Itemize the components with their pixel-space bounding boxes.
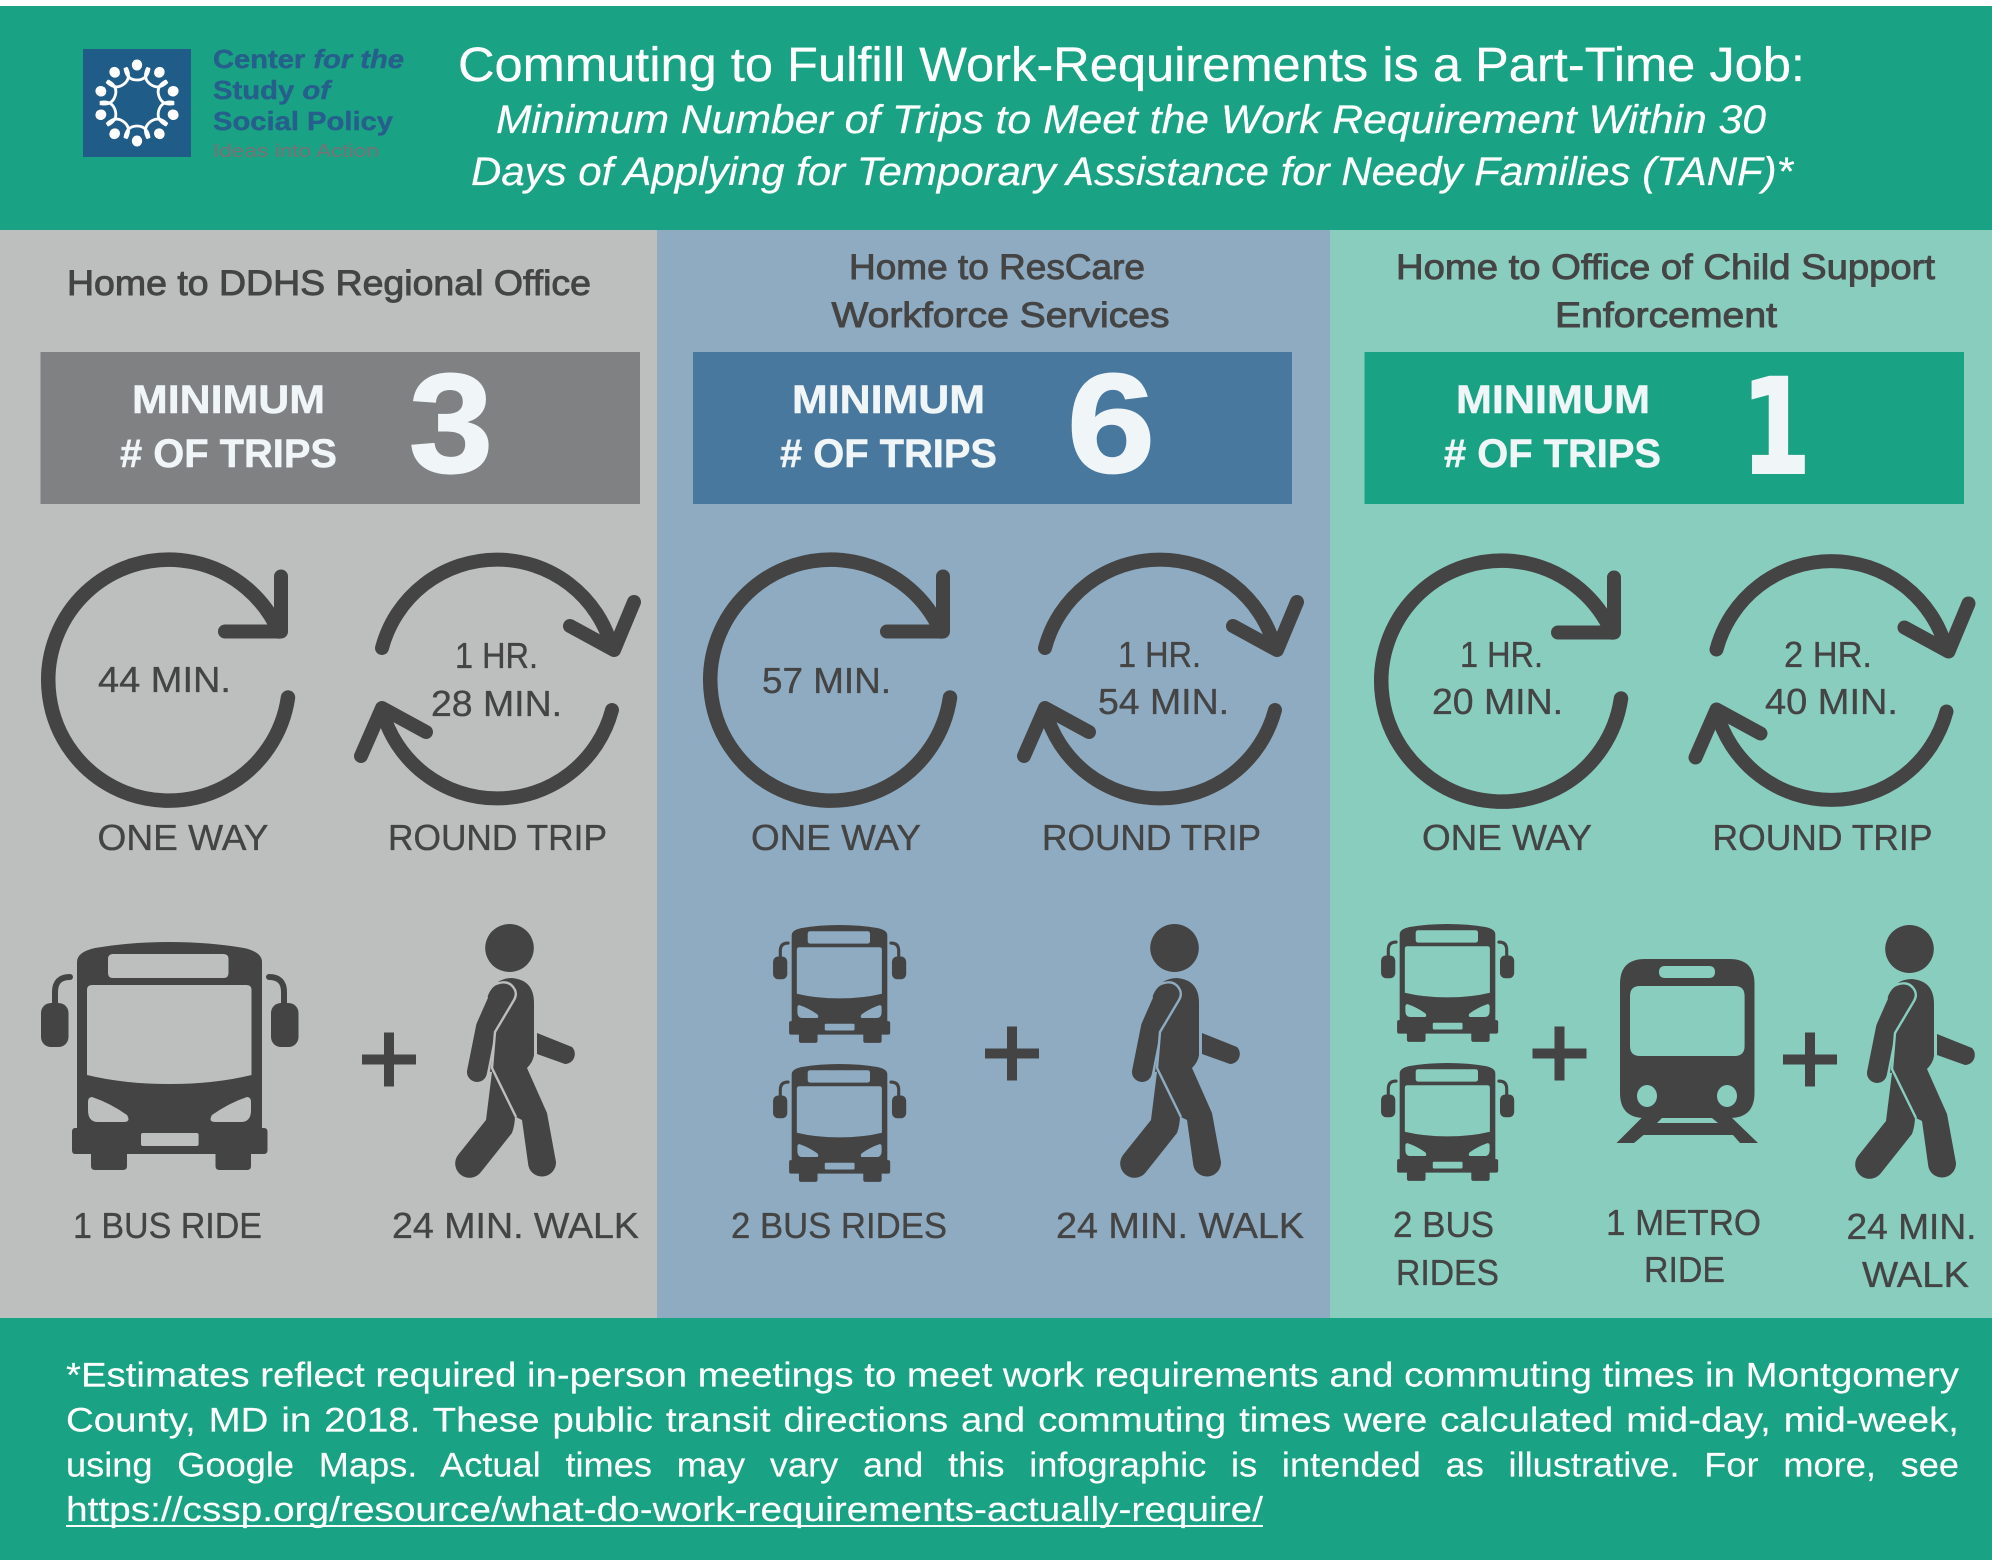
label: bus rides: 2 BUS RIDES	[731, 1205, 947, 1246]
heading: ResCare: Home to ResCare	[849, 248, 1145, 287]
plus sign	[985, 1026, 1039, 1080]
heading: ResCare: Workforce Services	[832, 296, 1170, 335]
label: bus rides: 2 BUS	[1393, 1204, 1494, 1245]
subtitle	[471, 98, 1795, 194]
round trip time: ROUND TRIP	[388, 817, 607, 858]
one way time: 20 MIN.	[1432, 681, 1563, 722]
label: walk: 24 MIN.	[1846, 1206, 1976, 1247]
one way time	[710, 560, 950, 858]
footer note: *Estimates reflect required in-person meetings to meet work requirements and commuting times in Montgomery	[66, 1356, 1960, 1394]
round trip time: 2 HR.	[1784, 634, 1872, 675]
plus sign	[362, 1032, 416, 1086]
round trip time	[1024, 560, 1297, 858]
heading: ResCare	[832, 248, 1170, 335]
footer note: County, MD in 2018. These public transit directions and commuting times were calculated mid-day, mid-week,	[66, 1402, 1959, 1440]
heading: Child Support: Home to Office of Child Support	[1396, 248, 1935, 287]
round trip time: 1 HR.	[455, 635, 538, 676]
label: walk: 24 MIN. WALK	[392, 1205, 639, 1246]
minimum trips box: 3: MINIMUM	[132, 378, 325, 422]
label: bus rides: RIDES	[1396, 1252, 1499, 1293]
heading: DDHS: Home to DDHS Regional Office	[67, 264, 591, 303]
label: metro ride	[1606, 1202, 1761, 1290]
label: walk	[1846, 1206, 1976, 1295]
subtitle: Minimum Number of Trips to Meet the Work Requirement Within 30	[496, 98, 1766, 142]
minimum trips box: 1: MINIMUM	[1456, 378, 1650, 422]
label: metro ride: 1 METRO	[1606, 1202, 1761, 1243]
title: Commuting to Fulfill Work-Requirements is a Part-Time Job:	[458, 39, 1805, 92]
footer note: https://cssp.org/resource/what-do-work-requirements-actually-require/	[66, 1491, 1263, 1529]
minimum trips box: 6: # OF TRIPS	[780, 432, 997, 476]
footer note: using Google Maps. Actual times may vary and this infographic is intended as illustrative. For more, see	[66, 1446, 1959, 1484]
panel: ResCare Workforce Services	[657, 230, 1330, 1318]
subtitle: Days of Applying for Temporary Assistance for Needy Families (TANF)*	[471, 150, 1795, 194]
plus sign	[1532, 1026, 1586, 1080]
one way time: 44 MIN.	[98, 659, 231, 700]
one way time: ONE WAY	[98, 817, 268, 858]
icon: metro train	[1616, 959, 1758, 1143]
minimum trips box: 1: # OF TRIPS	[1444, 432, 1661, 476]
one way time: ONE WAY	[751, 817, 921, 858]
label: metro ride: RIDE	[1644, 1249, 1725, 1290]
logo wordmark: Ideas into Action	[213, 141, 379, 161]
heading: Child Support: Enforcement	[1555, 296, 1777, 335]
round trip time: 40 MIN.	[1765, 681, 1898, 722]
round trip time: ROUND TRIP	[1042, 817, 1261, 858]
minimum trips box: 6: MINIMUM	[792, 378, 985, 422]
minimum trips box: 3: 3	[409, 344, 493, 502]
icon: walker	[1855, 925, 1975, 1179]
logo wordmark: Study of	[213, 75, 333, 105]
round trip time: 54 MIN.	[1098, 681, 1229, 722]
heading: Child Support	[1396, 248, 1935, 335]
icon: bus	[41, 942, 298, 1170]
plus sign	[1783, 1032, 1837, 1086]
icon: walker	[1120, 924, 1240, 1178]
icon: two buses	[1381, 924, 1514, 1181]
minimum trips box: 1	[1364, 351, 1964, 505]
minimum trips box: 3	[40, 344, 640, 504]
logo wordmark: Center for the	[213, 44, 404, 74]
logo: CSSP emblem	[83, 49, 191, 157]
one way time: 57 MIN.	[762, 660, 891, 701]
round trip time: 1 HR.	[1118, 634, 1201, 675]
logo wordmark	[213, 44, 404, 161]
one way time	[48, 560, 288, 858]
label: walk: 24 MIN. WALK	[1056, 1205, 1304, 1246]
one way time: ONE WAY	[1422, 817, 1592, 858]
footer note	[0, 1318, 1992, 1560]
minimum trips box: 3: # OF TRIPS	[120, 432, 337, 476]
minimum trips box: 6	[693, 344, 1292, 504]
round trip time	[1696, 561, 1968, 858]
label: walk: WALK	[1862, 1254, 1969, 1295]
logo wordmark: Social Policy	[213, 106, 394, 136]
round trip time	[361, 560, 634, 858]
label: bus rides	[1393, 1204, 1499, 1293]
round trip time: 28 MIN.	[431, 683, 562, 724]
icon: walker	[455, 924, 575, 1178]
one way time: 1 HR.	[1460, 634, 1543, 675]
one way time	[1381, 561, 1621, 858]
minimum trips box: 6: 6	[1067, 344, 1155, 502]
label: bus ride: 1 BUS RIDE	[73, 1205, 262, 1246]
panel: DDHS Regional Office	[0, 230, 657, 1318]
header banner	[0, 6, 1992, 230]
minimum trips box: 1: 1	[1741, 351, 1811, 505]
panel: Office of Child Support Enforcement	[1330, 230, 1992, 1318]
icon: two buses	[773, 925, 906, 1182]
round trip time: ROUND TRIP	[1712, 817, 1932, 858]
